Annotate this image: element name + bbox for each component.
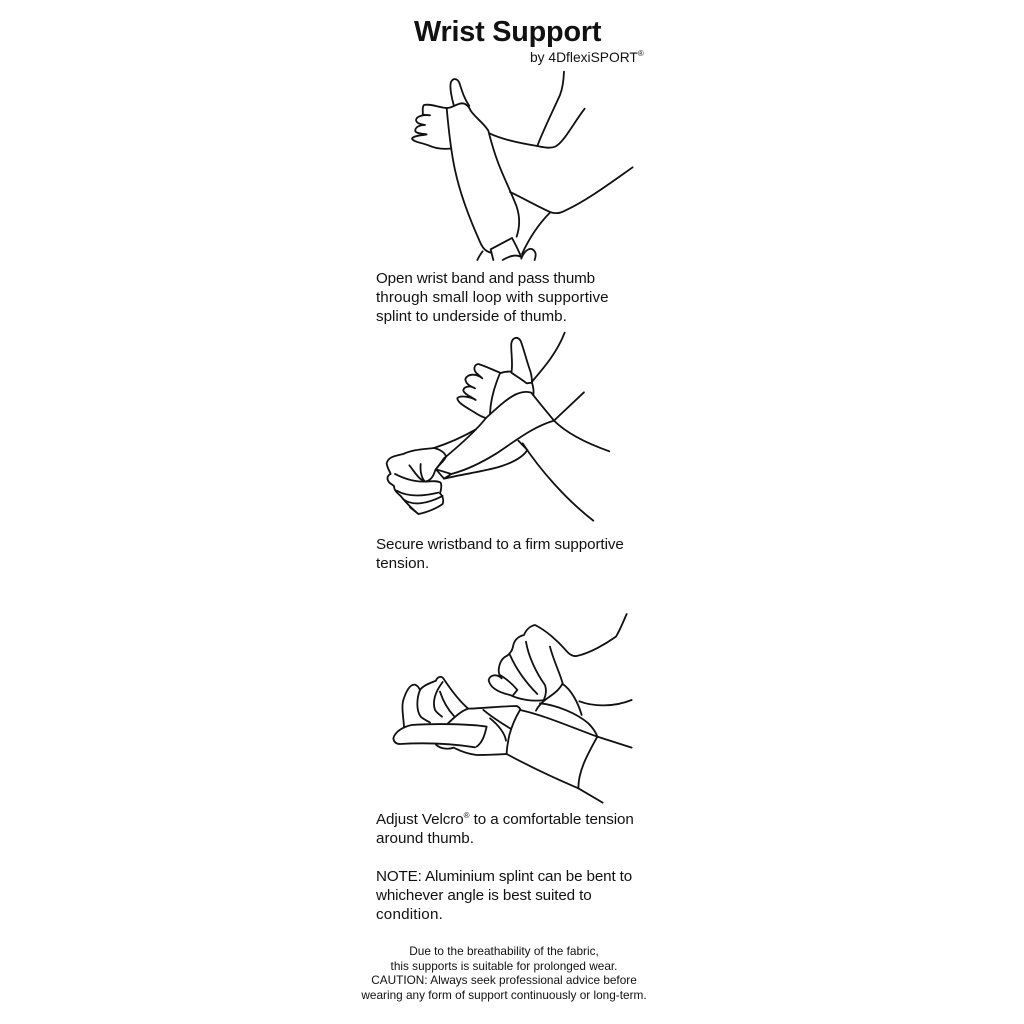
note text	[376, 868, 632, 923]
step 3 text: around thumb.	[376, 830, 474, 847]
illustration: adjusting velcro	[393, 614, 632, 803]
note text: condition.	[376, 906, 443, 923]
step 1 text: splint to underside of thumb.	[376, 308, 567, 325]
step 2 text	[376, 536, 624, 572]
step 1 text: Open wrist band and pass thumb	[376, 270, 595, 287]
note text: whichever angle is best suited to	[376, 887, 592, 904]
step 3 text	[376, 811, 634, 847]
caution footer	[361, 944, 647, 1002]
step 3 text: Adjust Velcro® to a comfortable tension	[376, 811, 634, 828]
illustration: thumb through loop	[412, 72, 633, 260]
caution footer: this supports is suitable for prolonged wear.	[391, 959, 617, 973]
subtitle: by 4DflexiSPORT®	[530, 49, 644, 65]
step 1 text	[376, 270, 609, 325]
title: Wrist Support	[414, 16, 601, 48]
step 2 text: Secure wristband to a firm supportive	[376, 536, 624, 553]
step 2 text: tension.	[376, 555, 429, 572]
illustration: securing wristband	[387, 333, 609, 521]
caution footer: wearing any form of support continuously or long-term.	[361, 988, 647, 1002]
note text: NOTE: Aluminium splint can be bent to	[376, 868, 632, 885]
caution footer: CAUTION: Always seek professional advice before	[371, 973, 637, 987]
caution footer: Due to the breathability of the fabric,	[409, 944, 599, 958]
step 1 text: through small loop with supportive	[376, 289, 609, 306]
